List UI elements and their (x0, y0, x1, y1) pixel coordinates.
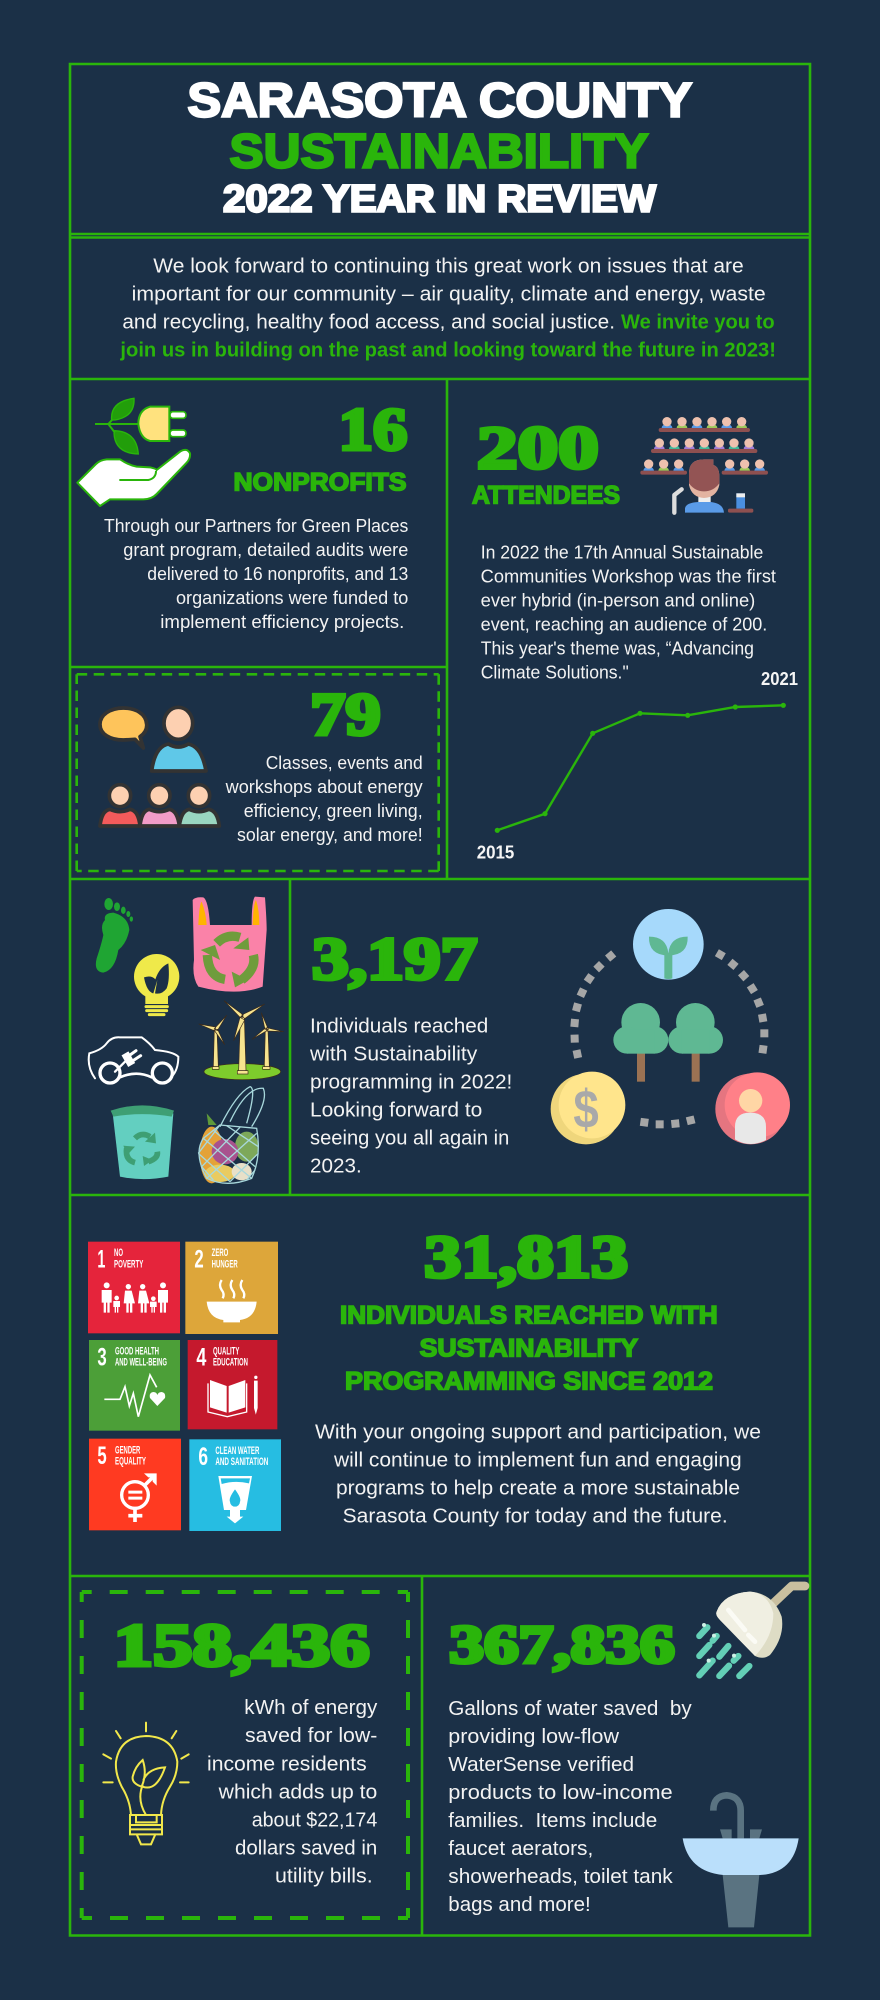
3,197 text: Individuals reached (310, 1015, 488, 1037)
diagram: trees, money and people cycle (551, 909, 790, 1144)
energy text: dollars saved in (235, 1837, 377, 1859)
tile: gender equality: EQUALITY (115, 1455, 146, 1467)
panel: SDG icon tiles (88, 1242, 281, 1531)
heading: individuals reached: SUSTAINABILITY (420, 1335, 638, 1363)
attendees text: ever hybrid (in-person and online) (481, 590, 755, 610)
31,813 text: will continue to implement fun and engaging (333, 1449, 742, 1471)
intro text block: and recycling, healthy food access, and social justice. (122, 312, 615, 334)
water text: bags and more! (448, 1894, 591, 1916)
intro text block: important for our community – air quality, climate and energy, waste (132, 284, 766, 306)
panel: nonprofits (77, 397, 408, 632)
icon: recycling bin (111, 1105, 174, 1179)
tile: clean water: AND SANITATION (215, 1456, 268, 1468)
icon: wind turbines (199, 1001, 284, 1080)
tile: no poverty (88, 1242, 180, 1333)
attendees text: In 2022 the 17th Annual Sustainable (481, 542, 763, 562)
tile: quality education: 4 (196, 1343, 206, 1371)
3,197 text: with Sustainability (309, 1043, 477, 1065)
panel: sustainability icons (89, 897, 284, 1183)
tile: quality education: EDUCATION (213, 1356, 248, 1368)
attendees text: Climate Solutions." (481, 662, 629, 682)
panel: classes and events (77, 674, 439, 871)
tile: quality education: QUALITY (213, 1345, 240, 1357)
attendees text: This year's theme was, “Advancing (481, 638, 754, 658)
tile: quality education (188, 1340, 277, 1429)
intro text block (119, 256, 776, 362)
nonprofits text: implement efficiency projects. (160, 612, 404, 632)
line chart: 2015 to 2021: 2021 (761, 669, 798, 689)
tile: good health: AND WELL-BEING (115, 1356, 167, 1368)
line chart: 2015 to 2021: 2015 (477, 842, 514, 862)
energy text: income residents (207, 1753, 367, 1775)
energy text: utility bills. (275, 1865, 373, 1887)
number: 200: 200 (477, 415, 599, 481)
31,813 text: With your ongoing support and participation, we (315, 1421, 761, 1443)
energy text (207, 1697, 377, 1887)
energy text: about $22,174 (252, 1809, 377, 1831)
heading: individuals reached (340, 1301, 718, 1395)
water text: providing low-flow (448, 1726, 620, 1748)
classes text: workshops about energy (225, 777, 423, 797)
intro text block: We look forward to continuing this great work on issues that are (153, 256, 744, 278)
tile: good health: 3 (97, 1343, 107, 1371)
number: 367,836: 367,836 (449, 1614, 675, 1674)
classes text (225, 753, 423, 845)
panel: 31,813 individuals (315, 1224, 761, 1527)
heading: individuals reached: PROGRAMMING SINCE 2012 (345, 1367, 713, 1395)
heading: attendees: ATTENDEES (472, 481, 620, 509)
tile: no poverty: 1 (97, 1245, 105, 1273)
title (188, 74, 692, 220)
intro text block: join us in building on the past and looking toward the future in 2023! (119, 340, 776, 362)
attendees text (481, 542, 776, 682)
icon: net produce bag (198, 1087, 264, 1183)
tile: good health (89, 1340, 180, 1431)
water text: WaterSense verified (448, 1754, 634, 1776)
icon: person circle (715, 1072, 790, 1144)
nonprofits text: Through our Partners for Green Places (104, 516, 408, 536)
icon: dollar coin (551, 1072, 625, 1144)
icon: leaf bulb outline (103, 1723, 189, 1844)
classes text: solar energy, and more! (237, 825, 423, 845)
water text (448, 1698, 692, 1916)
31,813 text (315, 1421, 761, 1527)
energy text: kWh of energy (244, 1697, 377, 1719)
3,197 text: programming in 2022! (310, 1071, 512, 1093)
nonprofits text: grant program, detailed audits were (123, 540, 408, 560)
icon: electric car (89, 1037, 178, 1083)
number: 16: 16 (339, 397, 407, 463)
panel: energy saved (82, 1592, 408, 1918)
tile: zero hunger: HUNGER (212, 1258, 238, 1270)
3,197 text: 2023. (310, 1155, 362, 1177)
number: 31,813: 31,813 (424, 1224, 628, 1290)
panel: water saved (448, 1586, 805, 1927)
title: 2022 YEAR IN REVIEW (223, 178, 656, 220)
water text: families. Items include (448, 1810, 657, 1832)
icon: sprout circle (633, 909, 704, 980)
number: 158,436: 158,436 (114, 1613, 370, 1679)
nonprofits text (104, 516, 408, 632)
panel: 3,197 individuals (309, 909, 790, 1177)
title: SARASOTA COUNTY (188, 74, 692, 128)
tile: clean water: CLEAN WATER (215, 1445, 259, 1457)
31,813 text: programs to help create a more sustainable (336, 1477, 740, 1499)
water text: faucet aerators, (448, 1838, 593, 1860)
heading: nonprofits: NONPROFITS (234, 468, 406, 496)
attendees text: event, reaching an audience of 200. (481, 614, 767, 634)
icon: speaking people (100, 707, 219, 826)
title: SUSTAINABILITY (230, 126, 648, 178)
icon: hand holding leaf plug (77, 398, 190, 506)
tile: good health: GOOD HEALTH (115, 1345, 159, 1357)
31,813 text: Sarasota County for today and the future. (343, 1505, 728, 1527)
number: 79: 79 (310, 682, 381, 748)
tile: zero hunger: ZERO (212, 1247, 229, 1259)
icon: sink (683, 1795, 799, 1927)
3,197 text (309, 1015, 512, 1177)
nonprofits text: organizations were funded to (176, 588, 408, 608)
attendees text: Communities Workshop was the first (481, 566, 776, 586)
tile: zero hunger: 2 (194, 1245, 204, 1273)
tile: gender equality (89, 1439, 181, 1530)
classes text: efficiency, green living, (244, 801, 423, 821)
panel: attendees (472, 415, 798, 862)
tile: zero hunger (185, 1242, 278, 1334)
tile: gender equality: GENDER (115, 1444, 140, 1456)
tile: gender equality: 5 (97, 1442, 107, 1470)
tile: clean water (189, 1439, 281, 1531)
nonprofits text: delivered to 16 nonprofits, and 13 (147, 564, 408, 584)
water text: products to low-income (448, 1782, 673, 1804)
dotted cycle (570, 949, 768, 1128)
icon: green footprint (96, 898, 133, 973)
energy text: which adds up to (218, 1781, 377, 1803)
water text: showerheads, toilet tank (448, 1866, 674, 1888)
heading: individuals reached: INDIVIDUALS REACHED WITH (340, 1301, 718, 1329)
icon: dollar coin: $ (573, 1080, 599, 1139)
icon: recycling bag (193, 897, 267, 992)
icon: audience and speaker (640, 417, 768, 513)
icon: leaf light bulb (134, 954, 179, 1015)
intro text block: We invite you to (621, 312, 775, 334)
icon: shower head (699, 1586, 805, 1676)
number: 3,197: 3,197 (312, 926, 477, 992)
3,197 text: Looking forward to (310, 1099, 482, 1121)
icon: two trees (613, 1003, 723, 1082)
tile: no poverty: POVERTY (114, 1258, 144, 1270)
tile: no poverty: NO (114, 1247, 123, 1259)
water text: Gallons of water saved by (448, 1698, 692, 1720)
3,197 text: seeing you all again in (310, 1127, 509, 1149)
energy text: saved for low- (245, 1725, 377, 1747)
line chart: 2015 to 2021 (477, 669, 798, 862)
classes text: Classes, events and (266, 753, 423, 773)
tile: clean water: 6 (198, 1443, 208, 1471)
